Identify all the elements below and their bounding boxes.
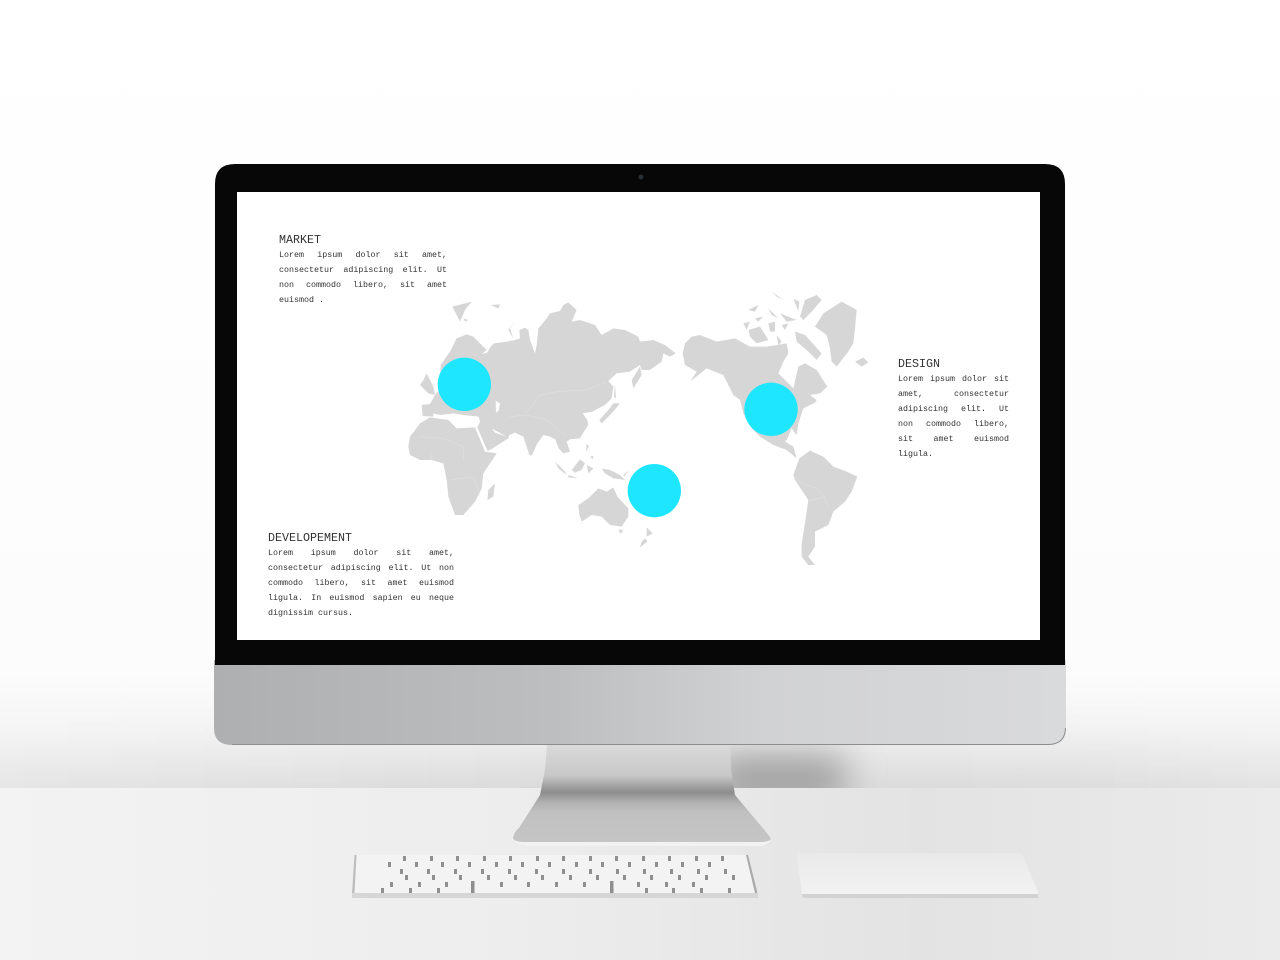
country borders <box>420 382 830 510</box>
text block: design <box>898 357 1009 459</box>
Novaya Zemlya <box>508 319 516 338</box>
body: developement <box>268 548 454 618</box>
New Guinea <box>602 468 629 480</box>
body: design: non commodo libero, <box>898 419 1009 429</box>
body: developement: commodo libero, sit amet euismod <box>268 578 454 588</box>
heading: developement: DEVELOPEMENT <box>268 531 352 545</box>
body: developement: consectetur adipiscing elit. Ut non <box>268 563 454 573</box>
heading: design: DESIGN <box>898 357 940 371</box>
body: design <box>898 374 1009 459</box>
wall tint at right <box>384 762 1081 788</box>
body: design: adipiscing elit. Ut <box>898 404 1009 414</box>
world map <box>408 292 868 565</box>
marker: Oceania <box>628 464 681 517</box>
monitor bezel <box>215 164 1065 665</box>
body: market: Lorem ipsum dolor sit amet, <box>279 250 447 260</box>
Indonesia and Philippines <box>555 443 593 478</box>
monitor chin <box>214 660 1066 745</box>
Greenland <box>815 302 857 367</box>
Eurasia <box>422 302 676 456</box>
Sakhalin, Japan and Kurils <box>599 367 642 423</box>
marker: North America <box>744 383 798 436</box>
South America <box>793 451 857 565</box>
North America <box>683 335 827 458</box>
Svalbard and Franz Josef Land <box>452 302 500 322</box>
desk surface <box>0 788 1280 960</box>
text block: developement <box>268 531 454 618</box>
inland seas <box>492 401 507 437</box>
body: market: consectetur adipiscing elit. Ut <box>279 265 447 275</box>
body: design: ligula. <box>898 449 933 459</box>
body: market <box>279 250 447 305</box>
Arctic islands <box>743 292 822 360</box>
body: design: sit amet euismod <box>898 434 1009 444</box>
body: developement: ligula. In euismod sapien eu neque <box>268 593 454 603</box>
monitor stand <box>513 745 771 846</box>
Iceland <box>855 358 868 367</box>
panel: screen <box>237 192 1040 640</box>
Africa <box>408 417 497 515</box>
Australia <box>578 487 628 527</box>
body: developement: dignissim cursus. <box>268 608 353 618</box>
Madagascar <box>487 483 495 500</box>
stand shadow on wall <box>715 755 845 805</box>
keyboard <box>352 855 758 898</box>
body: developement: Lorem ipsum dolor sit amet, <box>268 548 454 558</box>
New Zealand and Tasmania <box>618 527 653 547</box>
trackpad <box>797 853 1038 898</box>
body: market: euismod . <box>279 295 324 305</box>
British Isles <box>420 373 435 395</box>
marker: Europe <box>438 358 491 411</box>
body: market: non commodo libero, sit amet <box>279 280 447 290</box>
heading: market: MARKET <box>279 233 321 247</box>
icon: webcam <box>639 175 643 179</box>
text block: market <box>279 233 447 305</box>
body: design: Lorem ipsum dolor sit <box>898 374 1009 384</box>
body: design: amet, consectetur <box>898 389 1009 399</box>
